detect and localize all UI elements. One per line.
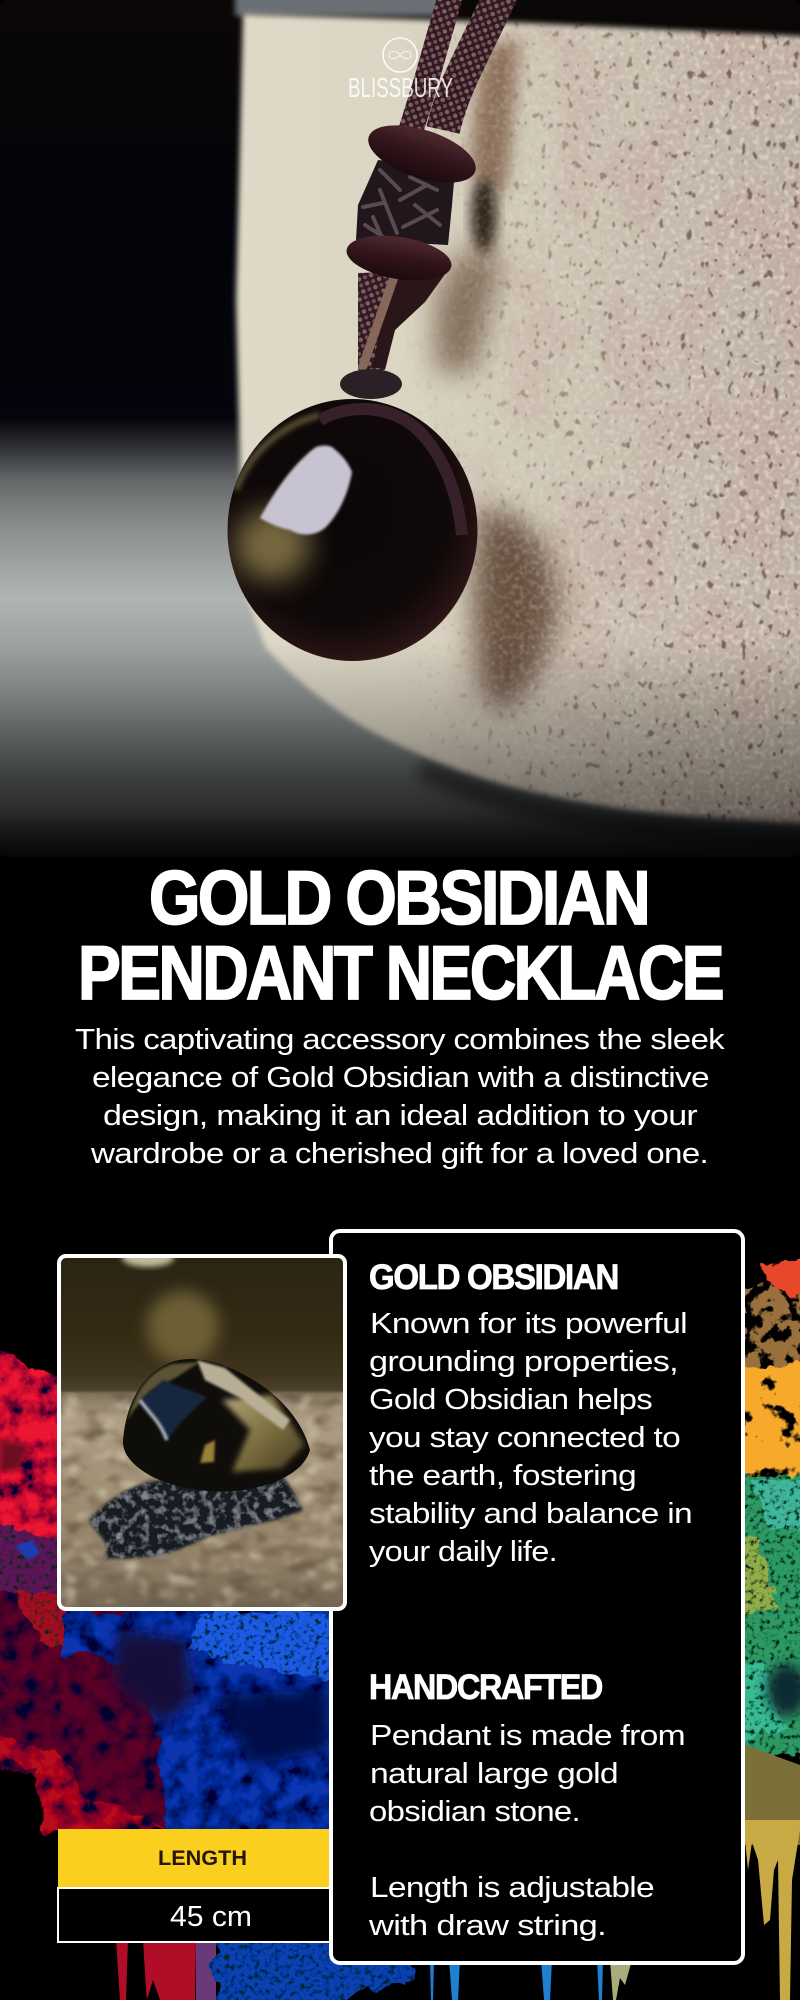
- dark backdrop: [0, 0, 800, 420]
- title: [78, 856, 722, 1016]
- stone reflections: [128, 1360, 305, 1472]
- text card: [331, 1231, 743, 1963]
- bright red paint: [0, 1346, 70, 1558]
- rock shadow: [90, 1478, 303, 1559]
- lower red paint: [0, 1730, 170, 1836]
- gold rim: [236, 415, 320, 490]
- length table: [58, 1829, 333, 1942]
- body text: handcrafted: [368, 1720, 685, 1942]
- paint splash: left: [0, 1346, 340, 1836]
- body text: gold obsidian: grounding properties,: [369, 1346, 678, 1378]
- dark knot shadow: [471, 176, 497, 256]
- green paint: [720, 1476, 800, 1760]
- blue reflection: [140, 1380, 207, 1440]
- lower knot shadow: [436, 250, 502, 372]
- photo frame: [59, 1256, 345, 1609]
- body text: handcrafted: Length is adjustable: [370, 1872, 654, 1904]
- highlight: [260, 446, 352, 535]
- purple drip: [196, 1940, 216, 2000]
- blurred backdrop: [61, 1258, 343, 1394]
- intro paragraph: [75, 1024, 726, 1170]
- body text: gold obsidian: you stay connected to: [369, 1422, 680, 1454]
- dark crimson paint: [0, 1530, 180, 1836]
- amber glint: [200, 1440, 215, 1463]
- teal patch: [720, 1660, 785, 1742]
- table value cell: [58, 1888, 333, 1942]
- stone photo scene: [59, 1249, 345, 1609]
- dark red fold: [0, 1440, 30, 1472]
- intro line 3: design, making it an ideal addition to your: [103, 1100, 698, 1132]
- dark navy patch: [110, 1630, 195, 1725]
- lower ring: [346, 236, 452, 280]
- rock dark texture: [59, 1392, 345, 1609]
- top background strip: [235, 0, 445, 16]
- section: gold obsidian: [369, 1258, 692, 1568]
- brand logo: [348, 38, 453, 103]
- top glare: [197, 1360, 290, 1430]
- cords rising: [411, 0, 502, 130]
- orange paint: [720, 1362, 800, 1482]
- paint splash: right: [720, 1262, 800, 2000]
- body text: handcrafted: with draw string.: [368, 1910, 606, 1942]
- title line 1: GOLD OBSIDIAN: [149, 856, 648, 941]
- dark speckle: [420, 21, 800, 820]
- paint drips: bottom: [116, 1940, 632, 2000]
- brown grain: [476, 56, 782, 686]
- bokeh top: [122, 1249, 174, 1267]
- blue spot: [15, 1540, 40, 1560]
- blue drip mass: [216, 1940, 420, 2000]
- ball reflections: [234, 409, 462, 581]
- purple patch: [0, 1525, 70, 1610]
- braid strands: [363, 170, 440, 238]
- speckled top paint: [720, 1280, 800, 1372]
- upper knot shadow: [470, 40, 520, 200]
- body text: gold obsidian: stability and balance in: [369, 1498, 692, 1530]
- body text: gold obsidian: Known for its powerful: [370, 1308, 687, 1340]
- cord wrap: [320, 409, 462, 535]
- cup contact shadow: [420, 768, 800, 840]
- red smear: [10, 1585, 72, 1650]
- stone photo card: [59, 1249, 345, 1609]
- braided knot: [356, 160, 455, 245]
- upper ring: [368, 125, 476, 182]
- pendant ball: [228, 369, 478, 661]
- body text: gold obsidian: your daily life.: [369, 1536, 557, 1568]
- heading: gold obsidian: GOLD OBSIDIAN: [369, 1258, 618, 1297]
- table surface: [0, 420, 800, 857]
- body text: gold obsidian: Gold Obsidian helps: [369, 1384, 652, 1416]
- olive gold paint: [745, 1745, 800, 1845]
- cord knot: [340, 369, 402, 399]
- olive sheen: [222, 1395, 305, 1472]
- card frame: [331, 1231, 743, 1963]
- pale yellow drip: [610, 1960, 632, 2000]
- pinkish mottling: [494, 25, 747, 720]
- body text: handcrafted: obsidian stone.: [369, 1796, 580, 1828]
- light grain: [446, 25, 800, 822]
- light cord: [363, 277, 394, 366]
- gold sheen: [234, 509, 310, 581]
- table value: 45 cm: [170, 1901, 252, 1933]
- blue drips right: [430, 1960, 603, 2000]
- braid body: [356, 160, 455, 245]
- intro line 4: wardrobe or a cherished gift for a loved one.: [90, 1138, 708, 1170]
- reflection edge: [140, 1400, 167, 1440]
- teal top patch: [755, 1480, 800, 1530]
- lime patch: [720, 1530, 780, 1620]
- obsidian stone: [123, 1359, 310, 1491]
- bottom edge fade: [0, 816, 800, 857]
- red-orange paint: [760, 1262, 800, 1296]
- body text: handcrafted: natural large gold: [370, 1758, 618, 1790]
- body text: handcrafted: Pendant is made from: [370, 1720, 685, 1752]
- intro line 2: elegance of Gold Obsidian with a distinctive: [92, 1062, 709, 1094]
- rock surface: [59, 1392, 345, 1609]
- infinity mark: [389, 51, 411, 59]
- hero photo: pendant on stone cup: [0, 0, 800, 857]
- cup lower fade: [278, 654, 800, 826]
- blue paint: [62, 1605, 340, 1835]
- body text: gold obsidian: [369, 1308, 692, 1568]
- gold drips: [745, 1820, 800, 2000]
- intro line 1: This captivating accessory combines the sleek: [75, 1024, 726, 1056]
- body text: gold obsidian: the earth, fostering: [369, 1460, 636, 1492]
- bokeh large: [147, 1291, 219, 1363]
- red drips: [116, 1940, 196, 2000]
- logo ring: [383, 38, 417, 72]
- stone cup: [225, 0, 800, 840]
- navy patch right: [215, 1690, 330, 1765]
- brand name: BLISSBURY: [348, 72, 453, 103]
- rock light texture: [59, 1392, 345, 1609]
- table header label: LENGTH: [158, 1847, 247, 1870]
- bright blue top: [190, 1610, 340, 1680]
- table header: [58, 1829, 333, 1887]
- ball shadow: [474, 509, 559, 714]
- dark hollow: [767, 1664, 800, 1716]
- gold rim: [128, 1362, 200, 1420]
- dark strand: [372, 270, 448, 368]
- lower cord strands: [358, 272, 398, 370]
- heading: handcrafted: HANDCRAFTED: [369, 1668, 602, 1707]
- section: handcrafted: [368, 1668, 685, 1942]
